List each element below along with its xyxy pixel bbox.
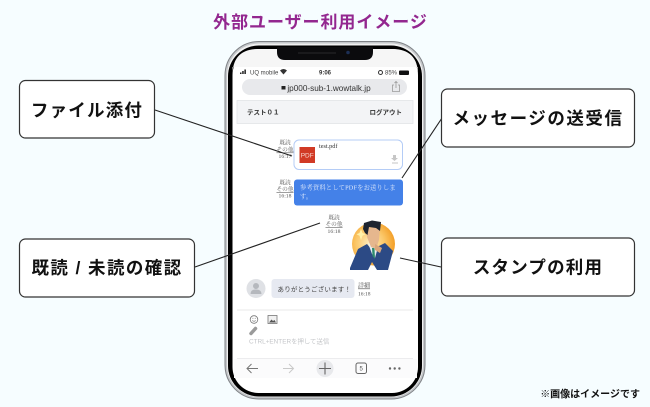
input area: CTRL+ENTERを押して送信 (249, 336, 330, 346)
blue message (294, 180, 403, 206)
camera (346, 51, 350, 54)
callout: messaging: メッセージの送受信 (452, 108, 624, 128)
stamp: businessman (350, 220, 395, 270)
read status: file: 既読 (279, 138, 291, 146)
notch (277, 47, 373, 60)
callout: file attachment (20, 80, 154, 138)
read status: file (276, 138, 294, 160)
input area (237, 310, 413, 346)
phone (225, 42, 425, 399)
callout: stamp (442, 238, 634, 296)
status bar: UQ mobile (250, 70, 279, 76)
icon: pdf: PDF (301, 152, 314, 160)
received message (246, 279, 371, 298)
read status: file: 16:17 (279, 154, 292, 160)
callout: messaging (442, 89, 634, 147)
icon: image (268, 316, 277, 324)
browser toolbar (234, 358, 417, 378)
icon: tabs: 5 (360, 367, 364, 373)
read status: text: その他 (276, 185, 294, 193)
app header: ログアウト (370, 108, 402, 116)
footnote: ※画像はイメージです (540, 388, 640, 400)
icon: smile (250, 316, 258, 323)
received message: ありがとうございます！ (278, 284, 351, 294)
connector: read status (195, 223, 320, 267)
read status: text: 16:18 (279, 194, 292, 200)
received message: 16:18 (358, 292, 371, 298)
status bar (240, 69, 409, 76)
callout: read status: 既読 / 未読の確認 (31, 258, 183, 278)
file message: test.pdf (319, 143, 338, 150)
icon: tabs (356, 363, 366, 374)
read status: stamp: 既読 (328, 214, 340, 222)
avatar (246, 279, 266, 298)
icon: forward arrow (283, 364, 294, 373)
blue message: 参考資料としてPDFをお送りしま (300, 182, 396, 192)
callout: stamp: スタンプの利用 (473, 258, 603, 278)
callout: read status (20, 239, 194, 297)
connector: file attachment (155, 110, 292, 156)
connector: stamp (400, 258, 441, 267)
speaker (298, 52, 336, 54)
blue message: す。 (300, 192, 312, 200)
read status: text (276, 178, 294, 200)
read status: stamp (325, 214, 343, 235)
address bar (242, 79, 407, 95)
app header: テスト０１ (247, 108, 280, 116)
read status: file: その他 (276, 146, 294, 154)
callout: file attachment: ファイル添付 (31, 100, 143, 120)
read status: text: 既読 (279, 178, 291, 186)
status bar: 9:06 (319, 70, 332, 76)
phone frame (225, 42, 425, 399)
status bar: 85% (385, 70, 398, 76)
icon: paperclip (251, 328, 256, 334)
icon: plus (316, 360, 334, 377)
title: 外部ユーザー利用イメージ (213, 13, 428, 32)
connector: messaging (402, 118, 442, 178)
address bar: jp000-sub-1.wowtalk.jp (286, 84, 371, 93)
read status: stamp: その他 (325, 220, 343, 228)
icon: more (389, 367, 401, 370)
app header (237, 100, 413, 124)
icon: download (391, 155, 398, 164)
read status: stamp: 16:18 (328, 229, 341, 235)
file message (294, 140, 402, 170)
icon: back arrow (247, 364, 258, 373)
received message: 詳細 (358, 282, 370, 290)
